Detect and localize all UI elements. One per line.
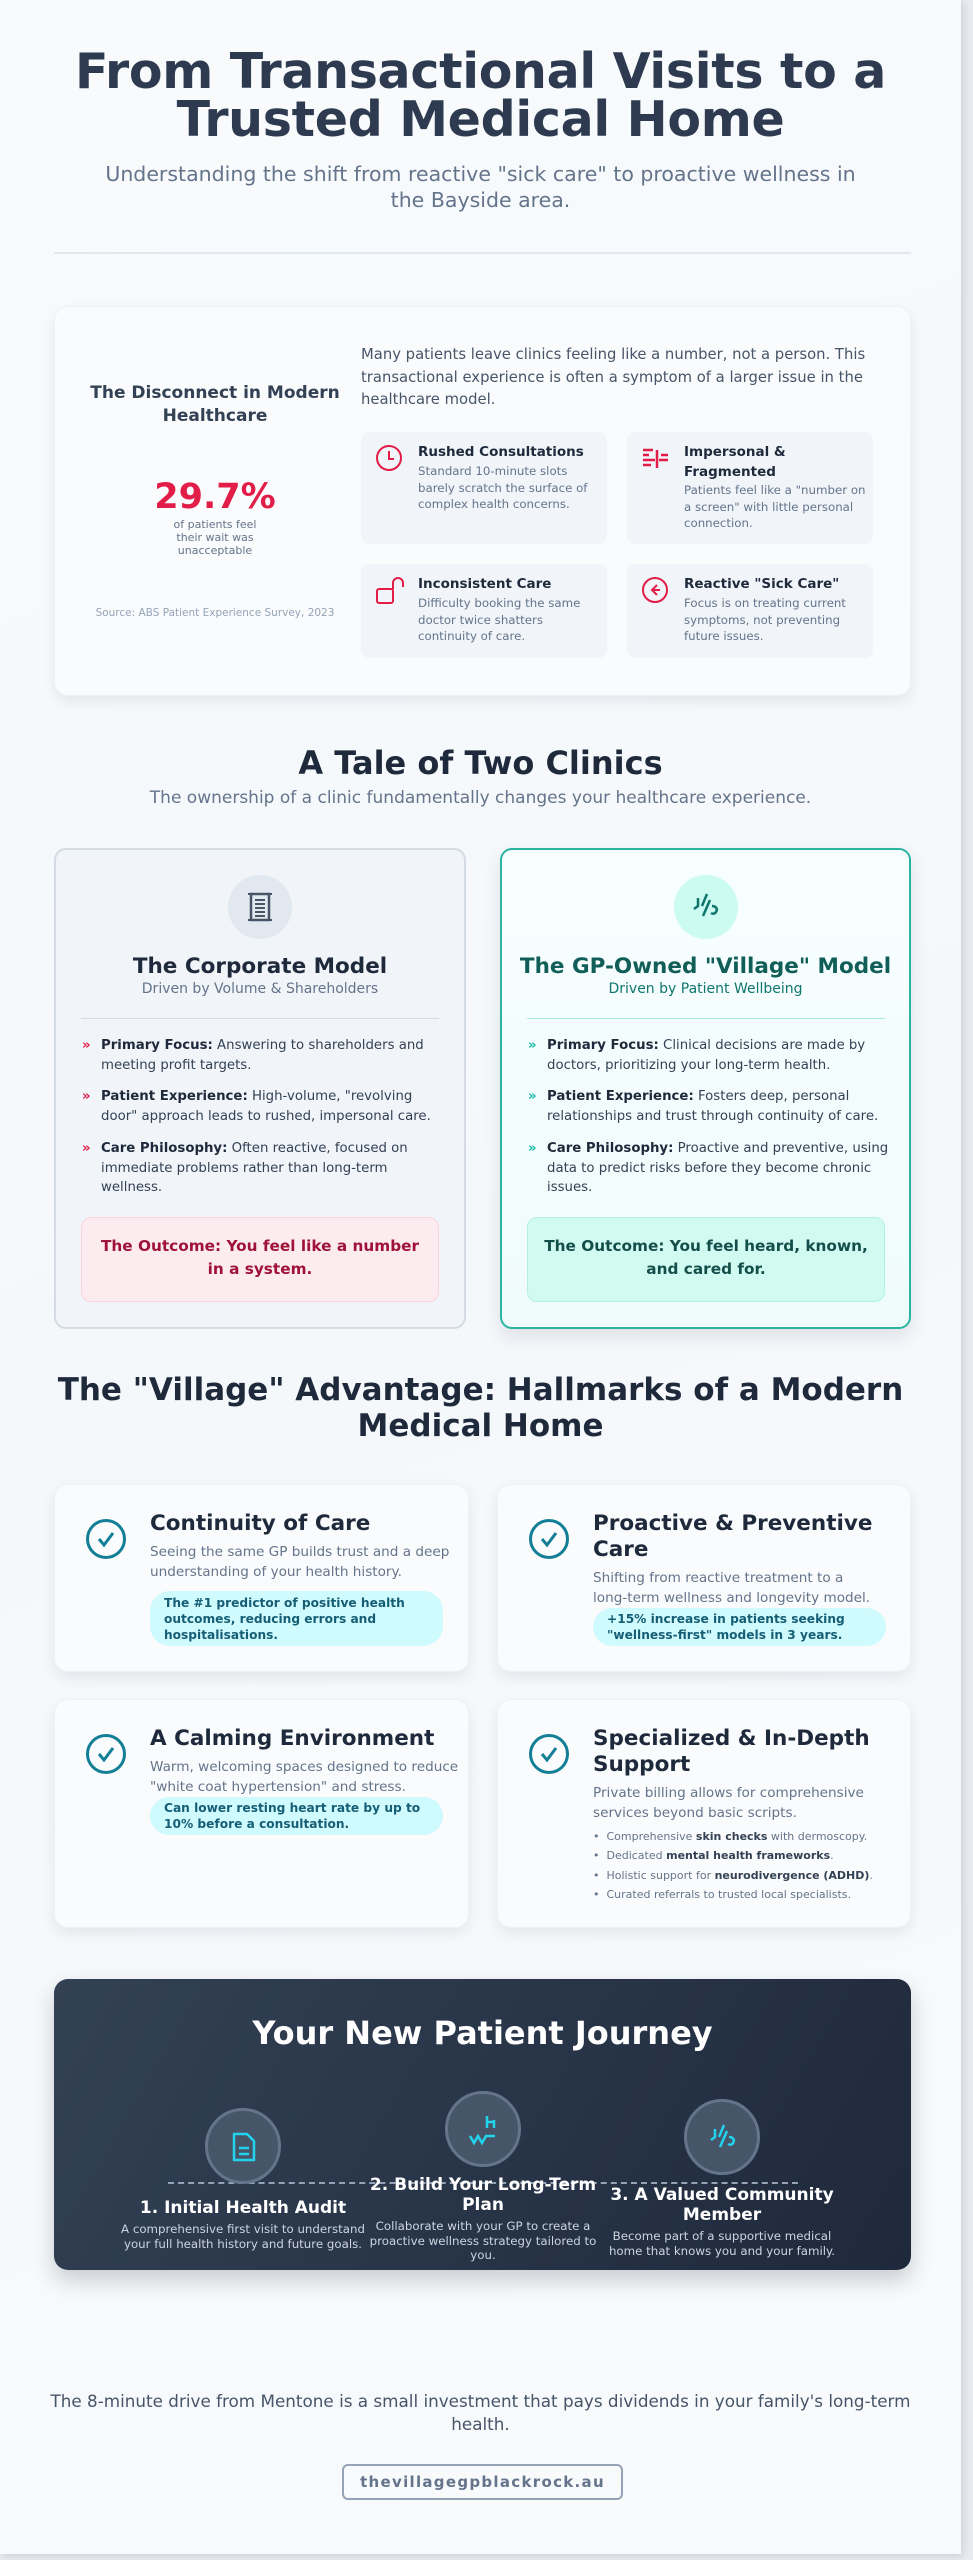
step 1: A comprehensive first visit to understand your full health history and future goals. [121, 2222, 365, 2250]
card: calming environment: Can lower resting heart rate by up to 10% before a consultation. [164, 1801, 420, 1831]
card: proactive care: +15% increase in patients seeking "wellness-first" models in 3 years. [607, 1612, 845, 1642]
bullets: village [528, 1038, 888, 1195]
card: specialized support [497, 1699, 911, 1928]
panel: corporate model [54, 848, 466, 1329]
bullets: corporate [82, 1038, 431, 1195]
step 2 [370, 2091, 596, 2262]
card: specialized support: Specialized & In-Depth [593, 1726, 870, 1751]
panel: corporate model: Driven by Volume & Shareholders [142, 981, 378, 997]
card: calming environment: A Calming Environment [150, 1726, 434, 1751]
card: rushed consultations [361, 432, 607, 544]
card: impersonal: Impersonal & [684, 444, 786, 460]
icon: check [529, 1519, 569, 1559]
title: From Transactional Visits to a [75, 43, 886, 100]
step 1: 1. Initial Health Audit [140, 2198, 346, 2218]
step 3: 3. A Valued Community Member [610, 2185, 834, 2225]
icon: check [86, 1734, 126, 1774]
heading: tale of two clinics: A Tale of Two Clinics [298, 744, 663, 782]
bullets: corporate: » [82, 1141, 91, 1156]
bullets: corporate: » [82, 1089, 91, 1104]
icon: stethoscope [684, 2099, 760, 2175]
stat: 29.7% [154, 477, 276, 557]
icon: document [205, 2108, 281, 2184]
card: proactive care [497, 1484, 911, 1672]
bullets: corporate: Care Philosophy: Often reactive, focused on immediate problems rather than long-term wellness. [101, 1141, 408, 1195]
list: services: • Dedicated mental health frameworks. [593, 1849, 834, 1862]
heading: disconnect: The Disconnect in Modern Healthcare [90, 383, 340, 426]
icon: building [228, 875, 292, 939]
outcome: village [527, 1217, 885, 1302]
card: rushed consultations: Rushed Consultations [418, 444, 584, 460]
icon: fragmented [643, 448, 668, 468]
icon: stethoscope [674, 875, 738, 939]
panel: village model: Driven by Patient Wellbeing [608, 981, 803, 997]
stat: 29.7%: 29.7% [154, 477, 276, 517]
list: services [593, 1830, 873, 1901]
step 1 [121, 2108, 365, 2250]
outcome: corporate [81, 1217, 439, 1302]
list: services: • Holistic support for neurodivergence (ADHD). [593, 1869, 873, 1882]
panel: village model [500, 848, 911, 1329]
icon: unlock [376, 577, 404, 604]
subtitle: Understanding the shift from reactive "sick care" to proactive wellness in the Bayside area. [105, 162, 856, 212]
outcome: village: The Outcome: You feel heard, known, and cared for. [544, 1237, 868, 1278]
card: inconsistent care: Difficulty booking the same doctor twice shatters continuity of care. [418, 596, 580, 643]
bullets: village: Patient Experience: Fosters deep, personal relationships and trust through continuity of care. [547, 1089, 878, 1124]
stat: 29.7%: of patients feel their wait was unacceptable [174, 518, 256, 557]
step 2: 2. Build Your Long-Term Plan [370, 2175, 596, 2215]
step 2: Collaborate with your GP to create a proactive wellness strategy tailored to you. [370, 2219, 596, 2262]
footer text: The 8-minute drive from Mentone is a small investment that pays dividends in your family's long-term health. [50, 2391, 910, 2434]
bullets: village: » [528, 1038, 537, 1053]
card: continuity of care: The #1 predictor of positive health outcomes, reducing errors and hospitalisations. [164, 1596, 405, 1642]
card: reactive sick care [627, 564, 873, 658]
heading: village advantage: Medical Home [358, 1408, 603, 1444]
title [75, 43, 886, 148]
heading: journey: Your New Patient Journey [252, 2014, 713, 2052]
bullets: corporate: Patient Experience: High-volume, "revolving door" approach leads to rushed, impersonal care. [101, 1089, 431, 1124]
panel: patient journey [54, 1979, 911, 2270]
card: continuity of care [54, 1484, 469, 1672]
heading: village advantage: The "Village" Advantage: Hallmarks of a Modern [58, 1372, 903, 1408]
icon: chart [445, 2091, 521, 2167]
step 3 [609, 2099, 835, 2258]
source: Source: ABS Patient Experience Survey, 2023 [96, 607, 334, 619]
icon: clock [376, 445, 402, 471]
card: proactive care: Shifting from reactive treatment to a long-term wellness and longevity model. [593, 1570, 870, 1606]
bullets: village: » [528, 1089, 537, 1104]
card: reactive sick care: Reactive "Sick Care" [684, 576, 839, 592]
bullets: village: Primary Focus: Clinical decisions are made by doctors, prioritizing your long-term health. [547, 1038, 865, 1072]
card: specialized support: Private billing allows for comprehensive services beyond basic scripts. [593, 1785, 864, 1820]
card: reactive sick care: Focus is on treating current symptoms, not preventing future issues. [684, 596, 846, 643]
card: inconsistent care [361, 564, 607, 658]
card: specialized support: Support [593, 1752, 690, 1777]
card: continuity of care: Continuity of Care [150, 1511, 370, 1536]
panel: the disconnect [54, 306, 911, 696]
subheading: The ownership of a clinic fundamentally changes your healthcare experience. [150, 788, 811, 808]
title: village: The GP-Owned "Village" Model [520, 954, 891, 979]
card: calming environment [54, 1699, 469, 1928]
card: impersonal: Patients feel like a "number on a screen" with little personal connection. [684, 483, 866, 530]
card: inconsistent care: Inconsistent Care [418, 576, 551, 592]
panel: patient journey: Become part of a supportive medical home that knows you and your family. [609, 2229, 835, 2258]
outcome: corporate: The Outcome: You feel like a number in a system. [101, 1237, 419, 1278]
bullets: corporate: » [82, 1038, 91, 1053]
card: impersonal: Fragmented [684, 464, 776, 480]
card: proactive care: Proactive & Preventive [593, 1511, 872, 1536]
title: corporate: The Corporate Model [133, 954, 387, 979]
icon: check [86, 1519, 126, 1559]
icon: arrow back [642, 577, 668, 603]
card: impersonal [627, 432, 873, 544]
heading: village advantage [58, 1372, 903, 1444]
icon: check [529, 1734, 569, 1774]
bullets: village: » [528, 1141, 537, 1156]
card: continuity of care: Seeing the same GP builds trust and a deep understanding of your health history. [150, 1544, 449, 1580]
card: proactive care: Care [593, 1537, 648, 1562]
list: services: • Curated referrals to trusted local specialists. [593, 1888, 851, 1901]
bullets: corporate: Primary Focus: Answering to shareholders and meeting profit targets. [101, 1038, 424, 1072]
card: calming environment: Warm, welcoming spaces designed to reduce "white coat hypertension" and stress. [150, 1759, 458, 1794]
card: rushed consultations: Standard 10-minute slots barely scratch the surface of complex health concerns. [418, 464, 587, 511]
bullets: village: Care Philosophy: Proactive and preventive, using data to predict risks before they become chronic issues. [547, 1141, 888, 1195]
list: services: • Comprehensive skin checks with dermoscopy. [593, 1830, 867, 1843]
button: website: thevillagegpblackrock.au [360, 2473, 605, 2491]
button: website [342, 2464, 623, 2500]
intro text: Many patients leave clinics feeling like a number, not a person. This transactional experience is often a symptom of a larger issue in the healthcare model. [361, 346, 865, 408]
title: Trusted Medical Home [177, 91, 784, 148]
